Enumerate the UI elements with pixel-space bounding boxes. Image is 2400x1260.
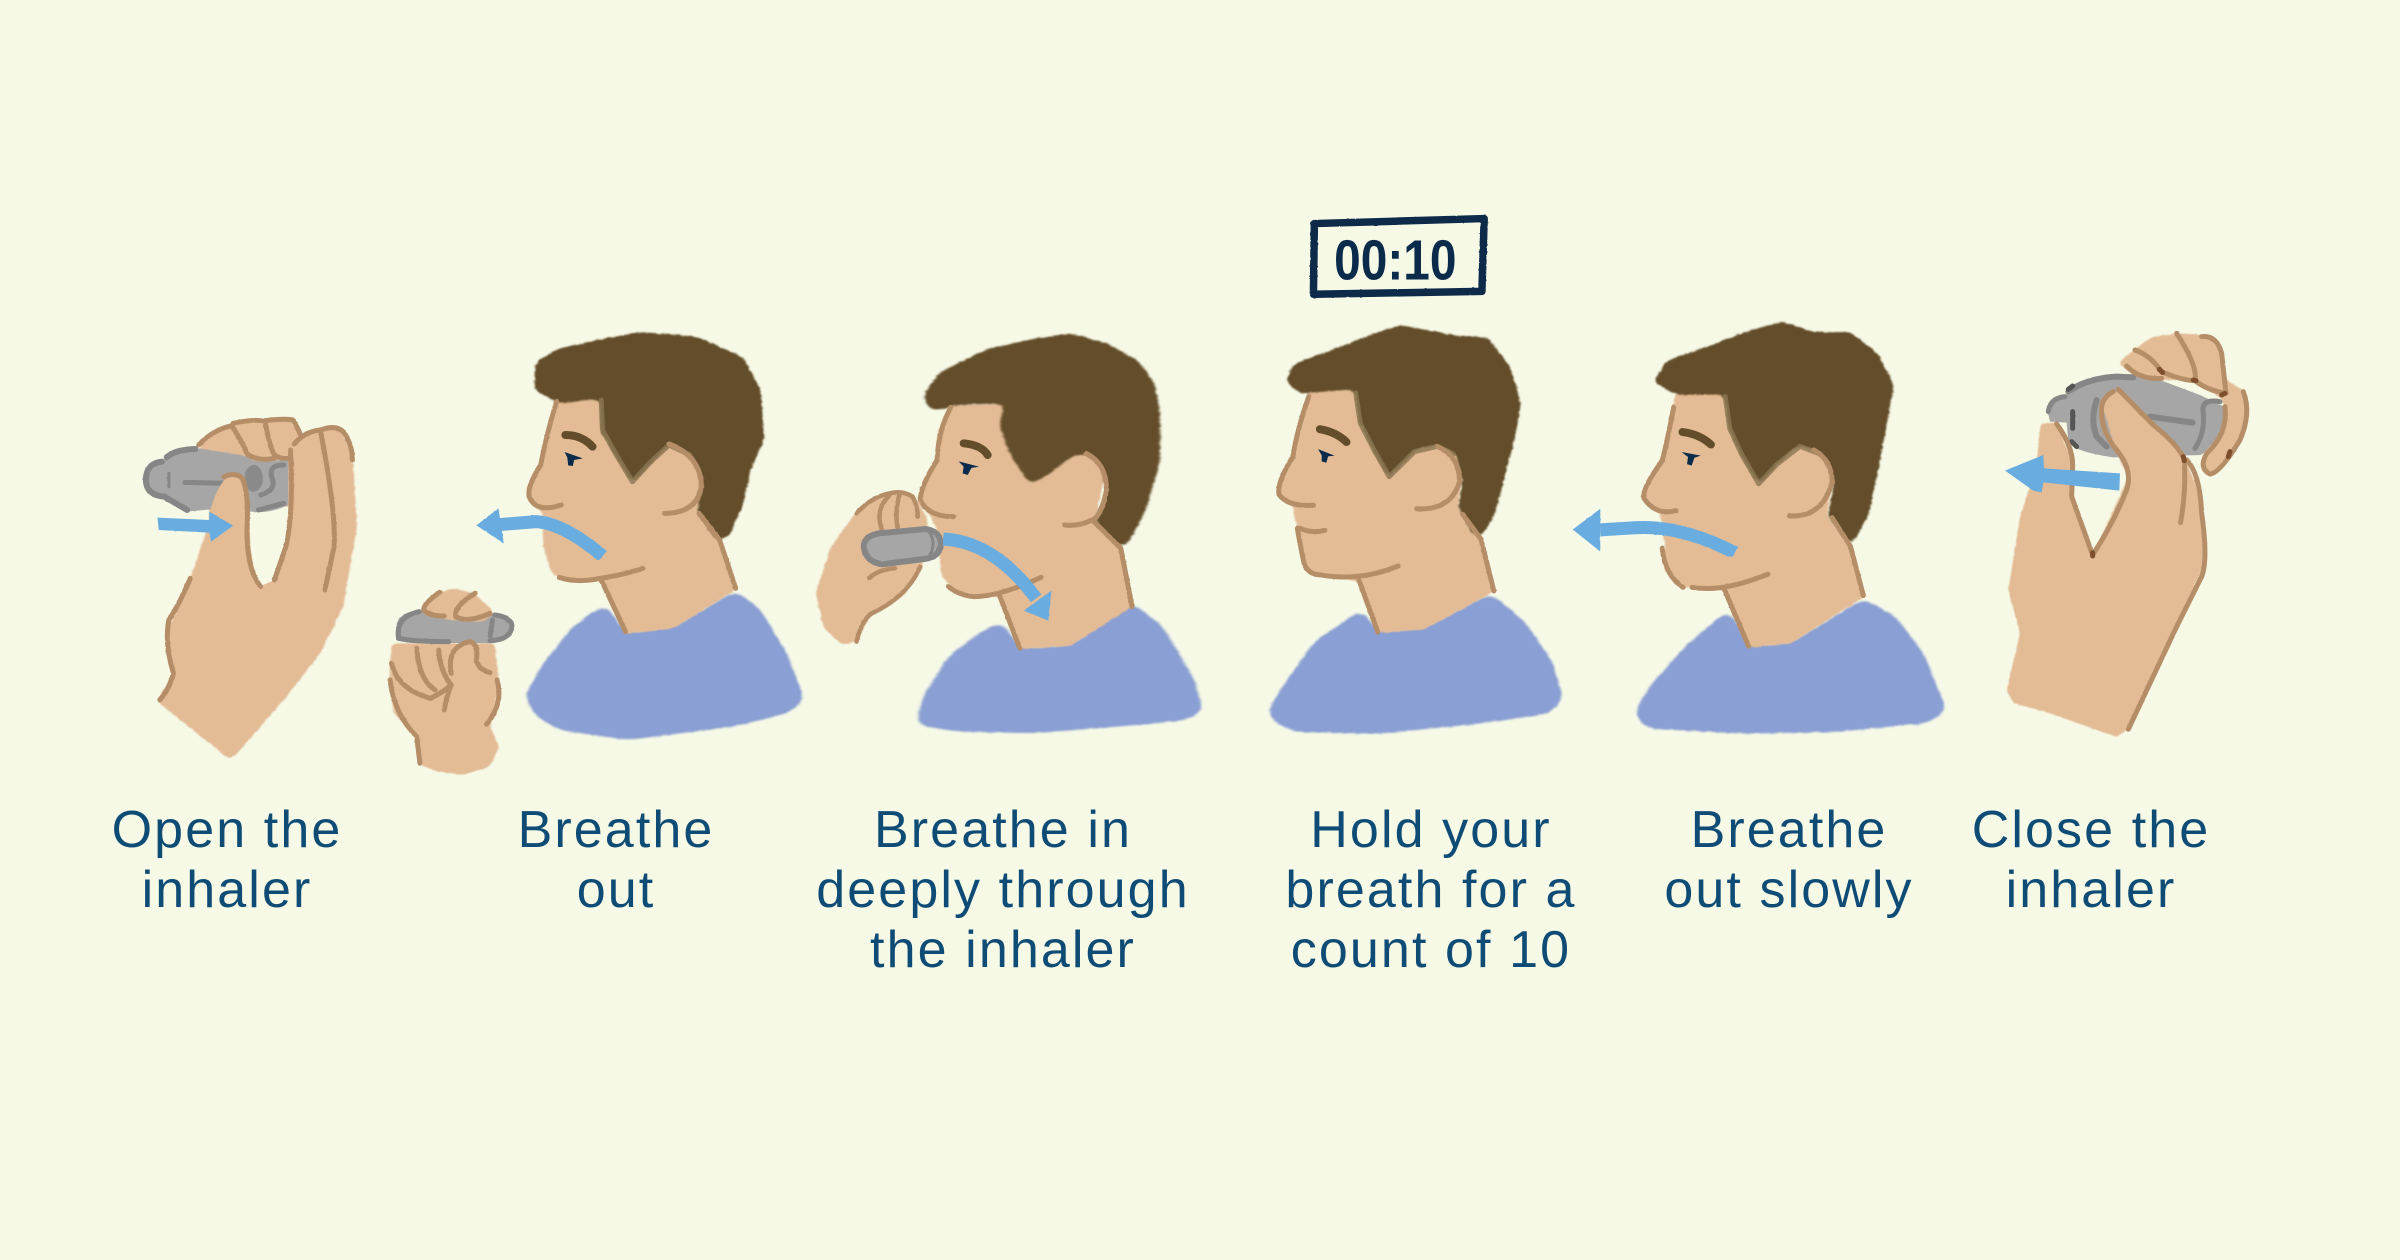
timer 00:10: 00:10 (1334, 230, 1456, 292)
hand outlines (2057, 333, 2247, 729)
caption: breathe out: Breathe (518, 801, 714, 859)
shirt (1635, 598, 1947, 734)
hairline shading (601, 400, 690, 482)
step 4 illustration: hold breath (1268, 219, 1564, 734)
thumb over inhaler (2102, 389, 2187, 507)
small hand holding inhaler (389, 588, 515, 775)
caption: breathe in deeply: Breathe in (874, 801, 1132, 859)
eyebrow (1682, 432, 1711, 445)
hair (534, 332, 764, 542)
eyebrow (1320, 429, 1346, 442)
gap between thumb and finger (249, 507, 289, 586)
eyebrow (565, 435, 593, 447)
step 6 illustration: hand closing inhaler (2005, 333, 2248, 737)
face outlines (1279, 396, 1494, 632)
fingers and thumb over inhaler (199, 418, 301, 462)
caption: breathe in deeply: deeply through (816, 861, 1190, 919)
face and neck (1277, 386, 1492, 633)
shirt (1268, 593, 1564, 734)
caption: open the inhaler: inhaler (142, 861, 312, 919)
shirt (525, 590, 805, 740)
face and neck (1644, 391, 1865, 647)
caption: breathe in deeply: the inhaler (870, 921, 1136, 979)
step 2 illustration: breathe out (389, 332, 805, 775)
hairline shading (1356, 393, 1453, 477)
hand (157, 418, 357, 759)
face and neck (920, 403, 1132, 649)
eye (959, 461, 979, 475)
caption: hold your breath: breath for a (1285, 861, 1577, 919)
hair (923, 333, 1160, 549)
face outlines (1644, 407, 1863, 646)
arrow: right (157, 512, 233, 542)
step 5 illustration: breathe out slowly (1573, 321, 1947, 734)
face and neck (527, 393, 736, 634)
eyebrow (964, 443, 988, 455)
arrow: breath in (943, 539, 1051, 621)
timer 00:10 (1313, 219, 1484, 294)
knuckle marks (2093, 369, 2230, 556)
hand palm and finger (2007, 393, 2207, 737)
hair (1653, 321, 1894, 545)
hairline shading (1725, 396, 1821, 484)
hand holding inhaler to mouth (816, 492, 941, 645)
step 1 illustration: hand opening inhaler (144, 418, 357, 759)
caption: close the inhaler: inhaler (2006, 861, 2176, 919)
caption: breathe out slowly: Breathe (1691, 801, 1887, 859)
face outlines (920, 407, 1132, 648)
eye (565, 452, 583, 466)
shirt (915, 602, 1203, 733)
caption: open the inhaler: Open the (112, 801, 342, 859)
caption: breathe out: out (577, 861, 655, 919)
arrow: breath out (476, 508, 603, 556)
upper fingers (2118, 333, 2248, 475)
caption: breathe out slowly: out slowly (1664, 861, 1914, 919)
arrow: left (2005, 455, 2120, 493)
caption: close the inhaler: Close the (1972, 801, 2210, 859)
step 3 illustration: breathe in through inhaler (816, 333, 1203, 733)
eye (1318, 449, 1335, 463)
eye (1682, 452, 1701, 466)
inhaler (144, 448, 288, 512)
inhaler (2047, 376, 2224, 457)
hair (1286, 325, 1521, 537)
caption: hold your breath: Hold your (1310, 801, 1552, 859)
hand outlines (160, 419, 352, 700)
arrow: breath out (1573, 509, 1735, 553)
face outlines (529, 402, 736, 632)
caption: hold your breath: count of 10 (1291, 921, 1571, 979)
